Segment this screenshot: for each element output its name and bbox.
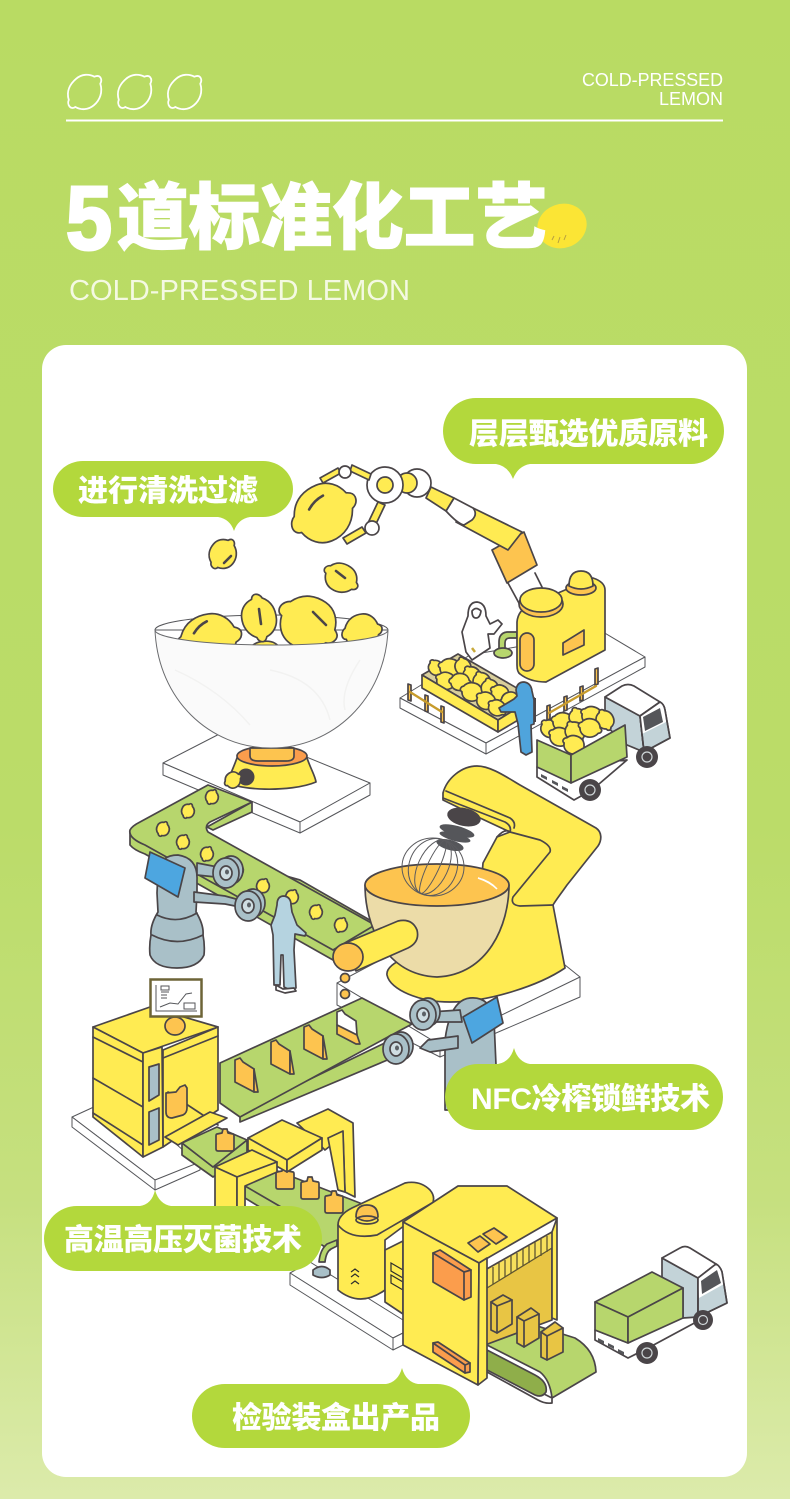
header caption: LEMON <box>659 89 723 109</box>
yellow feed roller <box>333 920 418 971</box>
delivery truck <box>595 1246 727 1364</box>
final conveyor with bottles <box>245 1165 365 1250</box>
header caption: COLD-PRESSED <box>582 70 723 90</box>
bubble: NFC cold pressing: NFC冷榨锁鲜技术 <box>471 1082 710 1116</box>
second short conveyor <box>182 1127 247 1177</box>
bowl base <box>221 746 316 791</box>
station 1: robot platform <box>400 632 645 754</box>
bubble: wash and filter <box>53 461 293 531</box>
title: 道标准化工艺 <box>117 179 547 259</box>
bubble: inspection and boxing <box>192 1368 470 1448</box>
control box <box>385 1241 403 1314</box>
packaging conveyor belt <box>487 1310 596 1403</box>
title: 5 <box>66 169 112 269</box>
fences <box>408 668 598 723</box>
robot arm <box>320 465 542 605</box>
bubble: NFC cold pressing <box>445 1048 723 1130</box>
header lemon outline icons <box>59 66 211 118</box>
truck with lemons <box>536 684 670 801</box>
back portal frame <box>248 1109 355 1197</box>
front portal frame <box>215 1150 277 1210</box>
packaging machine <box>403 1186 557 1385</box>
conveyor with bags <box>220 998 412 1122</box>
stand mixer <box>365 766 601 1002</box>
juice drops <box>340 974 350 998</box>
worker by conveyor <box>271 896 306 993</box>
bubble: inspection and boxing: 检验装盒出产品 <box>232 1401 440 1435</box>
decorative title lemon <box>531 197 593 255</box>
lemon crate <box>422 654 535 732</box>
lemon press machine <box>494 571 605 682</box>
bubble: sterilisation <box>44 1190 322 1271</box>
subtitle: COLD-PRESSED LEMON <box>69 275 410 307</box>
glass bowl with lemons <box>155 582 388 748</box>
green pipe and valve <box>313 1240 337 1278</box>
bubble: sterilisation: 高温高压灭菌技术 <box>64 1224 302 1257</box>
bowl platform <box>163 727 370 833</box>
worker in blue suit <box>499 682 536 755</box>
falling lemons <box>202 532 365 601</box>
bubble: select raw materials: 层层甄选优质原料 <box>469 417 708 451</box>
white card panel <box>42 345 747 1477</box>
cabinet platform <box>72 1095 200 1190</box>
bubble: wash and filter: 进行清洗过滤 <box>78 475 258 508</box>
mixer platform <box>337 945 580 1057</box>
conveyor belt with lemons <box>130 785 380 960</box>
monitor with chart <box>150 980 202 1035</box>
bubble: select raw materials <box>443 398 724 479</box>
header caption <box>582 70 723 109</box>
large gripped lemon <box>281 473 367 553</box>
sterilising cabinet <box>93 1007 227 1157</box>
gray robot arm with tablet <box>145 852 265 968</box>
packing line platform <box>290 1262 403 1350</box>
filling tank <box>338 1182 434 1299</box>
gray robot with blue tablet <box>383 997 503 1110</box>
worker in white suit <box>462 602 502 660</box>
product boxes <box>491 1295 563 1360</box>
